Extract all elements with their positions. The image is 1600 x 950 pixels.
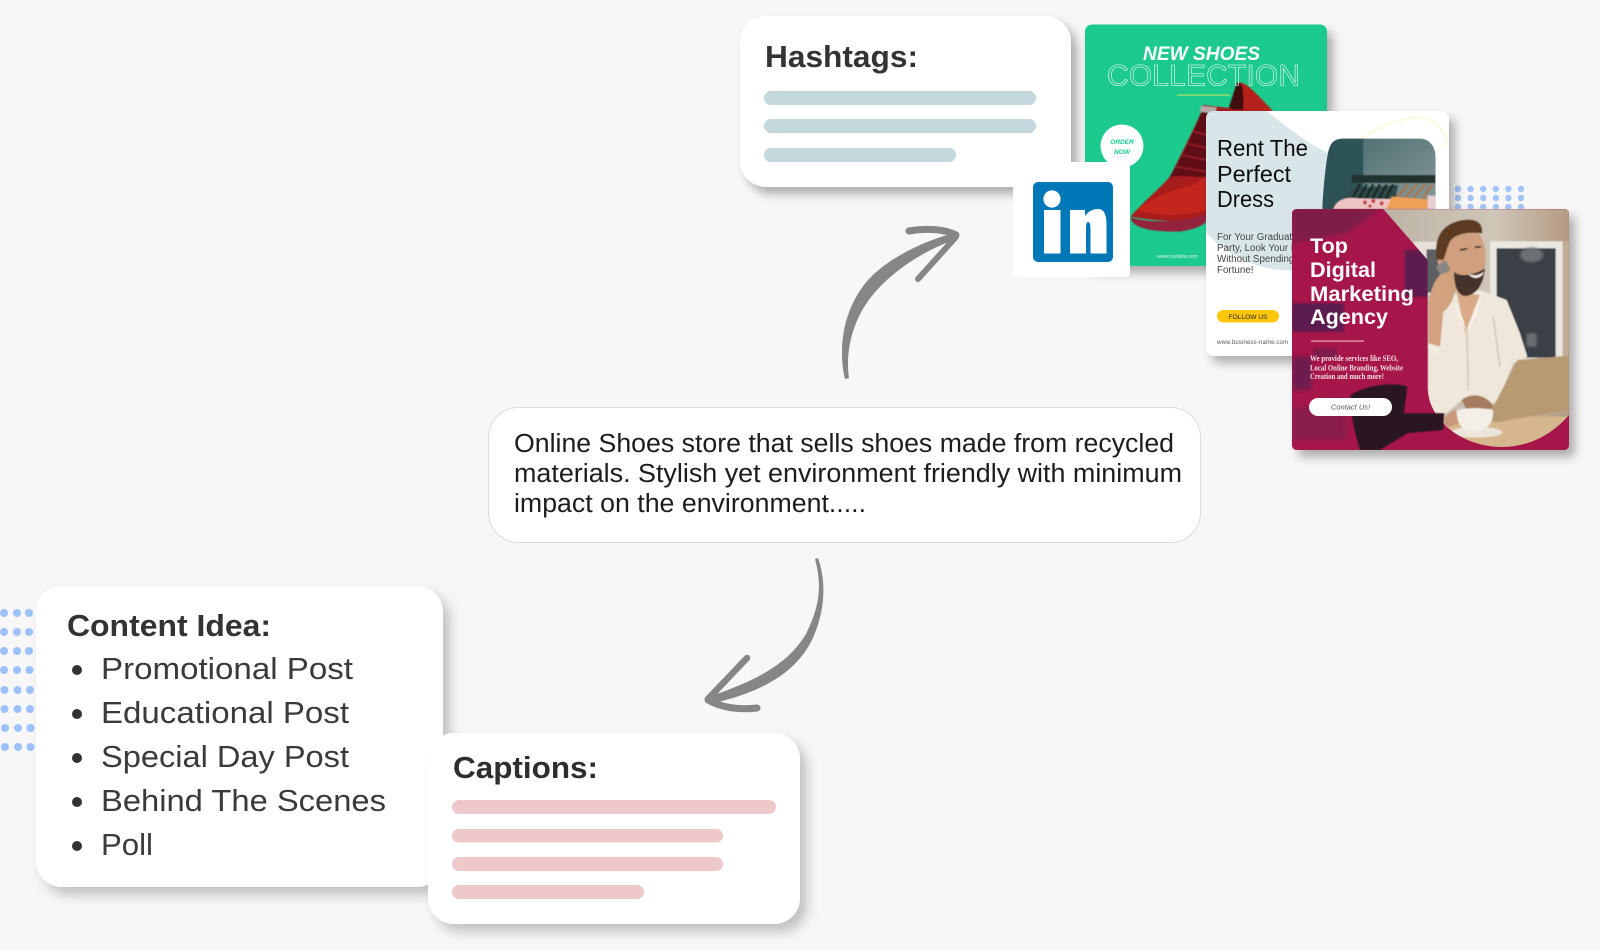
post headline: top digital marketing agency: Digital (1310, 258, 1376, 282)
prompt text: Online Shoes store that sells shoes made from recycled (514, 430, 1174, 458)
list: content ideas: Educational Post (101, 695, 349, 730)
button: follow us: FOLLOW US (1229, 314, 1268, 321)
post artwork: photo and magenta shapes (1292, 209, 1570, 450)
shoe illustration (1131, 83, 1280, 232)
post headline: rent the perfect dress: Rent The (1217, 135, 1308, 161)
post headline: rent the perfect dress: Perfect (1217, 161, 1292, 187)
social post: new shoes collection (1085, 24, 1327, 266)
post headline: collection outline: COLLECTION (1107, 60, 1300, 92)
post headline: top digital marketing agency (1310, 234, 1414, 329)
button: contact us (1309, 398, 1392, 416)
prompt text: materials. Stylish yet environment friendly with minimum (514, 460, 1182, 488)
accent line (1311, 340, 1364, 342)
accent line (1177, 94, 1230, 96)
social post: top digital marketing agency (1292, 209, 1570, 450)
faint yellow curve (1362, 118, 1447, 146)
post body copy: Fortune! (1217, 265, 1254, 276)
post headline: top digital marketing agency: Top (1310, 234, 1348, 258)
post body copy: services: Creation and much more! (1310, 372, 1384, 381)
post headline: rent the perfect dress (1217, 135, 1308, 212)
list: content ideas: Special Day Post (101, 739, 349, 774)
post url: shoes: www.coolshe.com (1156, 254, 1198, 260)
heading: hashtags: Hashtags: (765, 39, 918, 74)
icon: linkedin (1013, 162, 1130, 277)
post url: dress: www.business-name.com (1216, 340, 1288, 346)
social post: rent the perfect dress (1206, 111, 1449, 356)
button: contact us: Contact Us! (1331, 402, 1371, 412)
post body copy (1217, 232, 1311, 276)
post body copy: services: We provide services like SEO, (1310, 354, 1398, 363)
decorative dots: top right (1455, 186, 1524, 210)
pale blue blob (1206, 111, 1332, 280)
post body copy: Without Spending A (1217, 254, 1304, 265)
prompt text: impact on the environment..... (514, 490, 866, 518)
panel: content idea (36, 586, 443, 887)
post body copy: services (1310, 354, 1403, 381)
placeholder lines: captions (452, 800, 776, 899)
badge: order now: ORDER (1110, 139, 1134, 146)
button: follow us (1217, 310, 1279, 322)
panel: hashtags (740, 16, 1071, 187)
post body copy: services: Local Online Branding, Website (1310, 364, 1403, 372)
post headline: top digital marketing agency: Agency (1310, 305, 1388, 329)
placeholder lines: hashtags (764, 91, 1036, 162)
list: content ideas: Promotional Post (101, 651, 353, 686)
post headline: rent the perfect dress: Dress (1217, 186, 1274, 212)
arrow: up to linkedin (842, 229, 959, 379)
clothing rack photo (1322, 138, 1437, 210)
badge: order now: NOW (1114, 149, 1131, 156)
input prompt box (488, 408, 1200, 542)
badge: order now (1100, 124, 1144, 168)
heading: captions: Captions: (453, 750, 598, 785)
arrow: down to captions (708, 558, 823, 709)
prompt text (514, 430, 1182, 518)
list: content ideas (72, 651, 386, 862)
post headline: new shoes: NEW SHOES (1143, 44, 1260, 65)
panel: captions (428, 733, 800, 924)
post body copy: Party, Look Your Best (1217, 243, 1311, 254)
list: content ideas: Poll (101, 827, 153, 862)
post body copy: For Your Graduation (1217, 232, 1305, 243)
heading: content idea: Content Idea: (67, 608, 271, 643)
decorative dots: left (0, 609, 34, 751)
post headline: top digital marketing agency: Marketing (1310, 282, 1414, 306)
list: content ideas: Behind The Scenes (101, 783, 386, 818)
